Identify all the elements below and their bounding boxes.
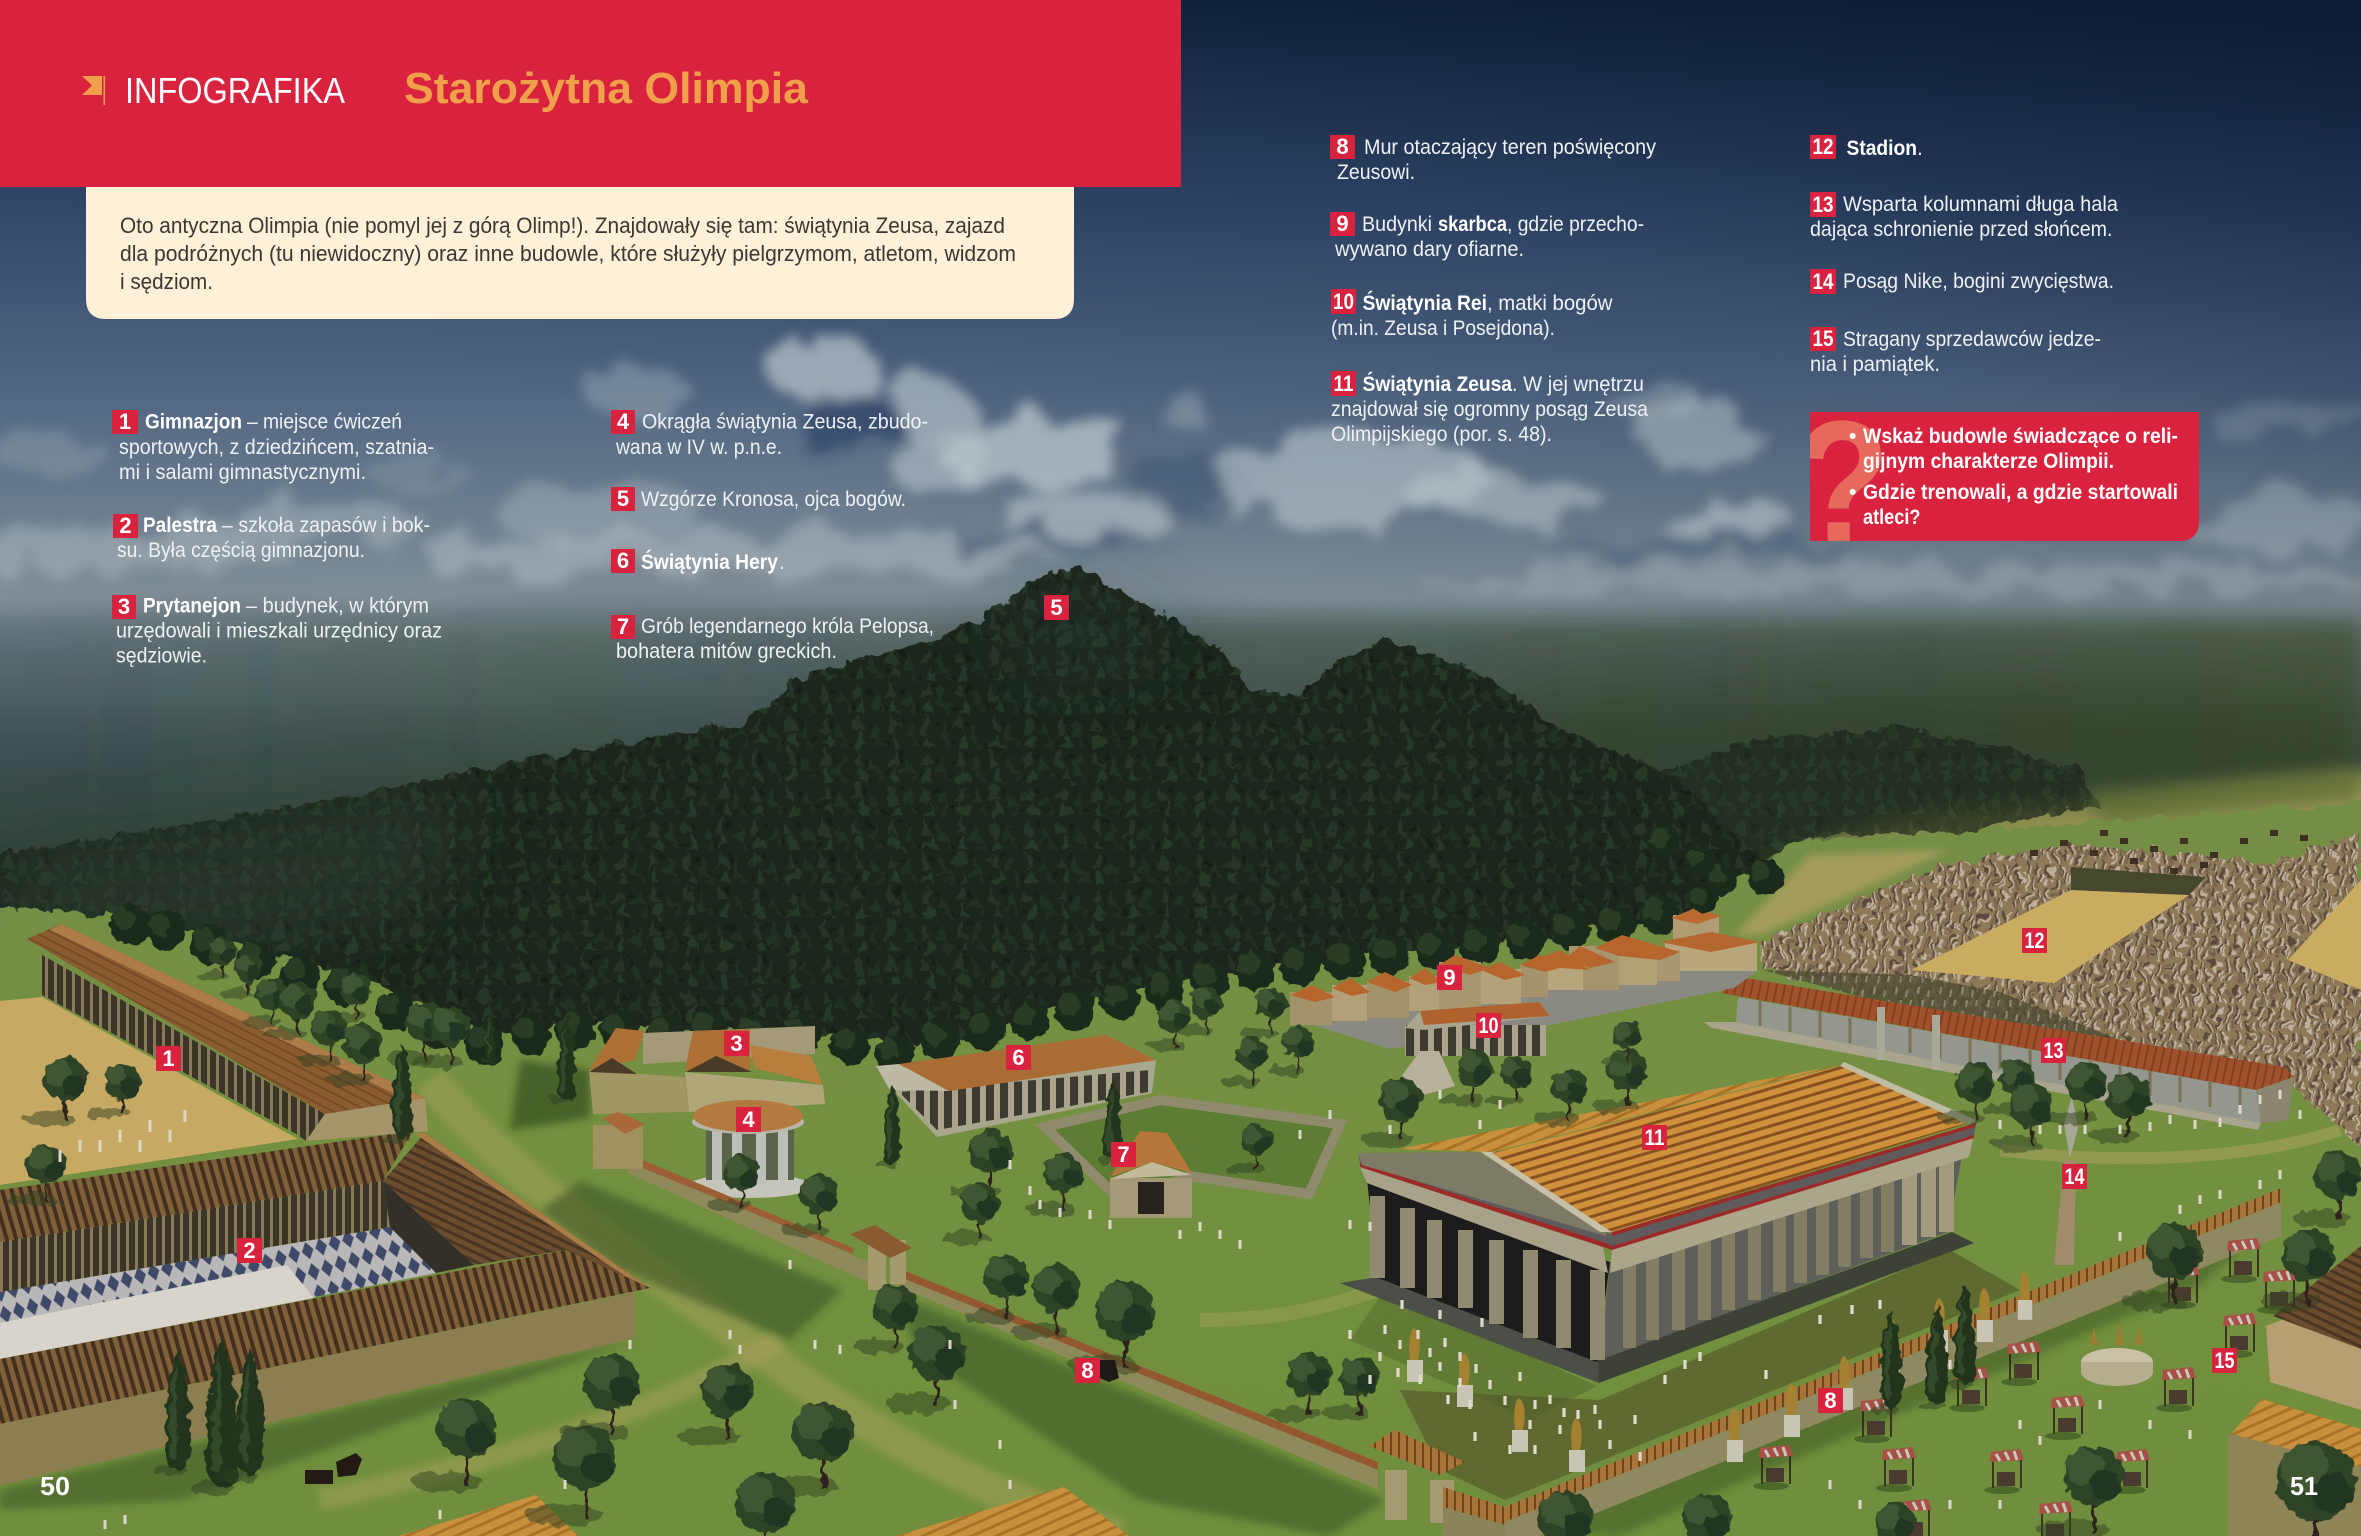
question panel xyxy=(1810,412,2199,541)
legend item 15: nia i pamiątek. xyxy=(1810,353,1940,376)
marker 9 xyxy=(1437,965,1462,990)
ground xyxy=(0,800,2361,1536)
legend item 2: 2 xyxy=(119,513,132,538)
icon: flag marker xyxy=(82,76,105,105)
legend item 14: Posąg Nike, bogini zwycięstwa. xyxy=(1843,270,2114,293)
legend item 7: Grób legendarnego króla Pelopsa, xyxy=(641,615,934,638)
stadium field xyxy=(1911,890,2189,983)
buildings 9: treasuries xyxy=(1290,908,1760,1025)
legend item 6: . xyxy=(779,551,785,574)
marker 5 xyxy=(1044,595,1069,620)
legend item 5: 5 xyxy=(617,486,629,511)
legend item 8: 8 xyxy=(1336,134,1349,159)
marker 5: 5 xyxy=(1050,595,1063,620)
legend item 1: 1 xyxy=(119,409,131,434)
legend item 8: Zeusowi. xyxy=(1337,161,1415,184)
legend item 4 xyxy=(611,409,928,459)
marker 8 right xyxy=(1818,1388,1843,1413)
legend item 6: Świątynia Hery xyxy=(641,550,778,574)
monument cone xyxy=(1401,1051,1455,1096)
legend item 5: Wzgórze Kronosa, ojca bogów. xyxy=(641,488,906,511)
intro text panel: i sędziom. xyxy=(120,269,213,294)
legend item 10: 10 xyxy=(1333,289,1354,314)
legend item 12: Stadion xyxy=(1846,137,1917,160)
marker 9: 9 xyxy=(1443,965,1456,990)
legend item 13 xyxy=(1810,192,2118,241)
building 11: temple of Zeus xyxy=(1340,1062,1976,1383)
sky xyxy=(0,0,2361,640)
temple columns xyxy=(1370,1196,1605,1360)
legend item 11 xyxy=(1331,371,1648,446)
marker 1 xyxy=(156,1046,181,1071)
legend item 11: Olimpijskiego (por. s. 48). xyxy=(1331,423,1552,446)
legend item 3: sędziowie. xyxy=(116,644,207,668)
legend item 12: 12 xyxy=(1812,134,1834,159)
forested Kronos hill xyxy=(0,568,1760,1070)
people xyxy=(60,1090,2300,1529)
gymnasium yard xyxy=(0,997,298,1185)
legend item 3 xyxy=(112,594,442,668)
stadium with spectators xyxy=(1735,830,2361,1147)
marker 8 right: 8 xyxy=(1824,1388,1837,1413)
building 1: gymnasium stoa xyxy=(27,924,428,1141)
marker 8 left: 8 xyxy=(1081,1358,1094,1383)
building 13: long stoa xyxy=(1704,977,2294,1130)
marker 10: 10 xyxy=(1478,1013,1498,1038)
distant landscape xyxy=(0,588,2361,910)
legend item 1: mi i salami gimnastycznymi. xyxy=(119,461,366,484)
icon: large question mark: ? xyxy=(1794,384,1890,585)
marker 2: 2 xyxy=(243,1238,256,1263)
legend item 2: su. Była częścią gimnazjonu. xyxy=(117,539,365,562)
legend item 3: 3 xyxy=(118,594,130,619)
title: Starożytna Olimpia xyxy=(404,64,809,113)
clouds xyxy=(0,342,2361,596)
legend item 4: 4 xyxy=(617,409,630,434)
legend item 9: wywano dary ofiarne. xyxy=(1334,238,1524,261)
legend item 7: 7 xyxy=(617,614,629,639)
legend item 12: . xyxy=(1917,137,1923,160)
legend item 8 xyxy=(1330,134,1656,184)
marker 4 xyxy=(736,1107,761,1132)
trees xyxy=(8,826,2361,1536)
legend item 15: 15 xyxy=(1812,326,1834,351)
column with Nike statue xyxy=(2054,1096,2078,1265)
enclosure wall 8 with gates xyxy=(593,1112,2281,1536)
building 2: palaestra xyxy=(0,1131,650,1485)
Pelopion enclosure xyxy=(1045,1100,1340,1200)
terrace wall under treasuries xyxy=(1313,950,1757,1049)
page number left: 50 xyxy=(40,1471,70,1501)
legend item 3: urzędowali i mieszkali urzędnicy oraz xyxy=(116,620,442,642)
legend item 3: – budynek, w którym xyxy=(246,594,429,618)
building: lower right house xyxy=(2228,1399,2361,1536)
questions xyxy=(1849,425,2178,529)
legend item 13: Wsparta kolumnami długa hala xyxy=(1843,193,2118,216)
legend item 1: Gimnazjon xyxy=(145,410,242,434)
legend item 1: – miejsce ćwiczeń xyxy=(247,410,402,434)
marker 15: 15 xyxy=(2214,1348,2234,1373)
buildings: bottom roofs xyxy=(398,1487,1129,1536)
legend item 15 xyxy=(1810,326,2101,376)
questions: atleci? xyxy=(1863,506,1920,529)
marker 1: 1 xyxy=(162,1046,175,1071)
legend item 9: skarbca xyxy=(1438,213,1507,236)
legend item 10: (m.in. Zeusa i Posejdona). xyxy=(1331,317,1555,340)
statues xyxy=(1407,1271,2032,1472)
legend item 8: Mur otaczający teren poświęcony xyxy=(1364,136,1656,159)
marker 7: 7 xyxy=(1117,1142,1130,1167)
questions: Gdzie trenowali, a gdzie startowali xyxy=(1863,481,2178,504)
legend item 7: bohatera mitów greckich. xyxy=(616,640,837,663)
legend item 3: Prytanejon xyxy=(143,594,241,618)
legend item 4: wana w IV w. p.n.e. xyxy=(615,436,782,459)
legend item 11: znajdował się ogromny posąg Zeusa xyxy=(1331,398,1648,421)
marker 7 xyxy=(1111,1142,1136,1167)
legend item 11: Świątynia Zeusa xyxy=(1362,372,1512,396)
legend item 15: Stragany sprzedawców jedze- xyxy=(1843,328,2101,351)
trees along forest edge xyxy=(110,895,1680,1075)
legend item 9: 9 xyxy=(1336,211,1349,236)
ground paths and shadows xyxy=(0,1060,2340,1536)
legend item 9 xyxy=(1330,211,1644,261)
section label: INFOGRAFIKA xyxy=(125,70,345,111)
marker 8 left xyxy=(1075,1358,1100,1383)
marker 6: 6 xyxy=(1012,1045,1025,1070)
marker 4: 4 xyxy=(742,1107,755,1132)
building 7: tomb of Pelops xyxy=(1110,1131,1192,1218)
legend item 1 xyxy=(112,409,434,484)
questions: Wskaż budowle świadczące o reli- xyxy=(1863,425,2178,448)
marker 3 xyxy=(724,1031,749,1056)
legend item 12 xyxy=(1810,134,1923,160)
legend item 11: 11 xyxy=(1334,371,1354,396)
intro text panel xyxy=(86,187,1074,319)
marker 11: 11 xyxy=(1644,1125,1664,1150)
building 6: temple of Hera xyxy=(876,1035,1156,1137)
horse cart xyxy=(305,1453,362,1484)
page number right: 51 xyxy=(2290,1471,2318,1501)
forest shading xyxy=(0,590,1200,960)
intro text panel: Oto antyczna Olimpia (nie pomyl jej z górą Olimp!). Znajdowały się tam: świątynia Zeusa, zajazd xyxy=(120,213,1005,238)
market stalls xyxy=(1753,1238,2297,1536)
legend item 14: 14 xyxy=(1812,269,1834,294)
legend item 13: dająca schronienie przed słońcem. xyxy=(1810,218,2112,241)
questions: • xyxy=(1849,425,1856,448)
legend item 13: 13 xyxy=(1812,192,1834,217)
building: round structure at right edge xyxy=(2266,1246,2361,1410)
building 3: prytaneion xyxy=(589,1026,825,1114)
legend item 10: , matki bogów xyxy=(1487,292,1613,315)
marker 3: 3 xyxy=(730,1031,743,1056)
legend item 2: Palestra xyxy=(143,514,217,537)
legend item 10: Świątynia Rei xyxy=(1362,291,1487,315)
legend item 2 xyxy=(113,513,430,562)
questions: gijnym charakterze Olimpii. xyxy=(1863,450,2114,473)
legend item 11: . W jej wnętrzu xyxy=(1512,373,1644,396)
marker 12: 12 xyxy=(2024,928,2044,953)
questions: • xyxy=(1849,481,1856,504)
building 4: round temple (tholos) xyxy=(688,1100,812,1198)
legend item 10 xyxy=(1331,289,1613,340)
legend item 6: 6 xyxy=(617,548,629,573)
round fountain xyxy=(2081,1321,2153,1386)
map number markers xyxy=(156,595,2237,1413)
marker 6 xyxy=(1006,1045,1031,1070)
red title banner xyxy=(0,0,1181,187)
legend item 9: Budynki xyxy=(1362,213,1432,236)
legend item 9: , gdzie przecho- xyxy=(1507,213,1644,236)
intro text panel: dla podróżnych (tu niewidoczny) oraz inne budowle, które służyły pielgrzymom, atletom, widzom xyxy=(120,241,1016,266)
legend item 2: – szkoła zapasów i bok- xyxy=(222,514,430,537)
right hills and meadow xyxy=(1640,729,2361,905)
marker 14: 14 xyxy=(2064,1164,2085,1189)
legend item 4: Okrągła świątynia Zeusa, zbudo- xyxy=(642,410,928,434)
legend item 1: sportowych, z dziedzińcem, szatnia- xyxy=(119,436,434,459)
marker 2 xyxy=(237,1238,262,1263)
marker 13: 13 xyxy=(2044,1038,2064,1063)
building 10: temple of Rhea xyxy=(1405,1002,1550,1056)
legend item 7 xyxy=(611,614,934,663)
